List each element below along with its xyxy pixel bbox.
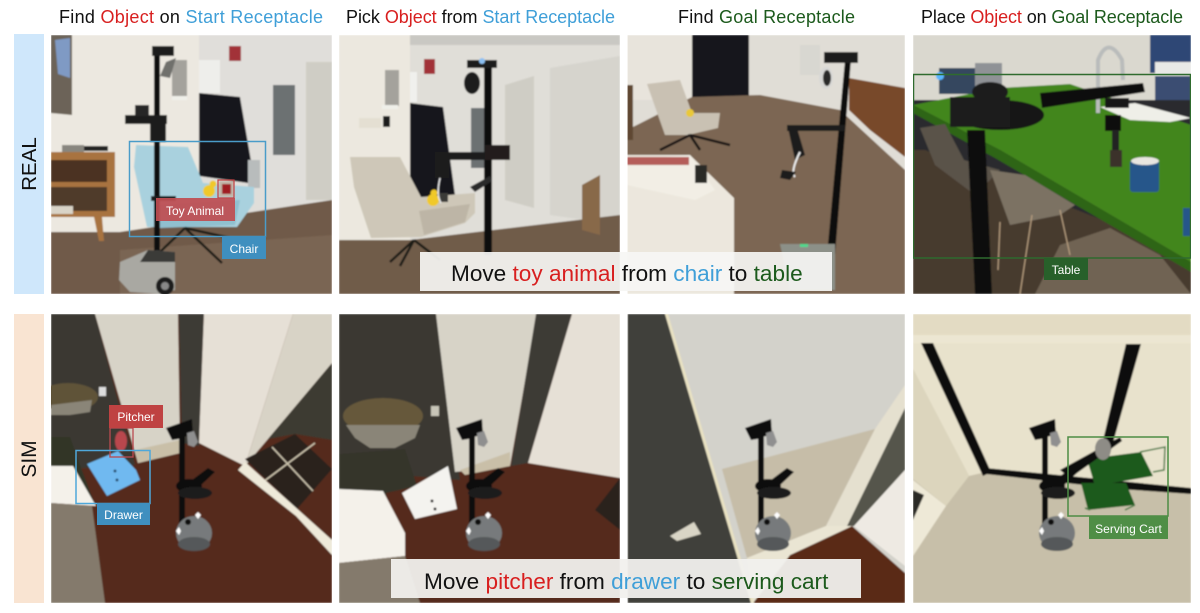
label: serving cart: Serving Cart	[1095, 522, 1163, 536]
label: serving cart	[1089, 516, 1168, 539]
row tab: real: REAL	[18, 137, 41, 191]
label: drawer	[97, 503, 150, 525]
label: chair	[222, 236, 266, 259]
panel: sim find goal	[627, 314, 905, 603]
row tab: sim: SIM	[18, 440, 41, 478]
panel: real place object	[913, 35, 1191, 294]
panel: real find goal	[627, 35, 905, 294]
label: table: Table	[1052, 263, 1081, 277]
bounding box: drawer	[76, 450, 150, 504]
title: pick object from start receptacle: Pick Object from Start Receptacle	[346, 7, 615, 27]
label: drawer: Drawer	[104, 508, 143, 522]
bounding box: pitcher	[110, 428, 133, 457]
label: table	[1044, 258, 1088, 280]
instruction box: real task	[420, 252, 832, 291]
label: chair: Chair	[230, 242, 258, 256]
bounding box: toy animal	[218, 180, 234, 198]
row tab: sim	[14, 314, 44, 603]
bounding box: chair	[130, 142, 266, 236]
panel: sim pick object	[339, 314, 620, 603]
instruction box: real task: Move toy animal from chair to table	[451, 261, 803, 286]
label: pitcher	[109, 405, 163, 428]
label: pitcher: Pitcher	[117, 410, 155, 424]
bounding box: table	[914, 74, 1190, 258]
panel: real pick object	[339, 35, 620, 294]
bounding box: serving cart	[1068, 437, 1168, 516]
row tab: real	[14, 34, 44, 294]
title: find object on start receptacle: Find Object on Start Receptacle	[59, 7, 323, 27]
label: toy animal: Toy Animal	[166, 204, 224, 218]
title: find goal receptacle: Find Goal Receptacle	[678, 7, 855, 27]
panel: sim find object	[38, 314, 332, 603]
instruction box: sim task: Move pitcher from drawer to serving cart	[424, 569, 829, 594]
panel: sim place object	[913, 314, 1191, 603]
panel: real find object	[51, 35, 332, 295]
label: toy animal	[156, 198, 235, 221]
title: place object on goal receptacle: Place Object on Goal Receptacle	[921, 7, 1183, 27]
instruction box: sim task	[391, 559, 861, 598]
